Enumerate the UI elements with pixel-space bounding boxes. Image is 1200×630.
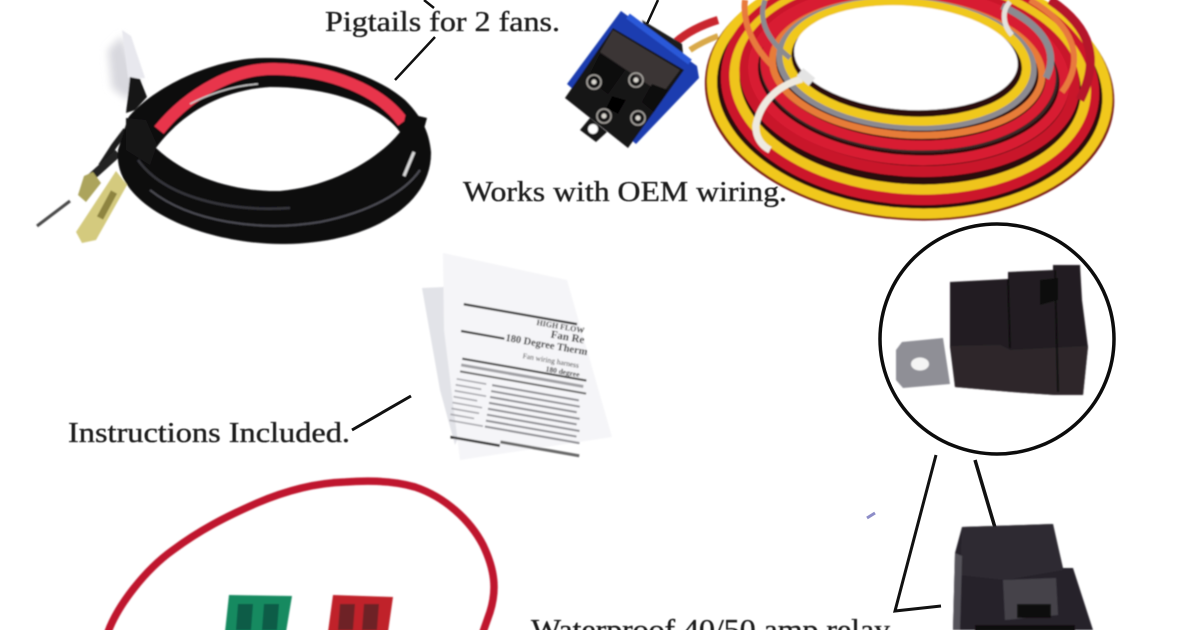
- coil hole: [791, 0, 1021, 117]
- leader lines: relay: [895, 455, 996, 611]
- red fuse: [328, 595, 393, 630]
- coil body: [118, 58, 431, 244]
- connector wires: [676, 20, 718, 42]
- leaflet text: [440, 303, 602, 461]
- leader line: instructions: [352, 396, 411, 430]
- pigtail harness: black and red coil: [37, 30, 431, 244]
- leaflet text: Fan Re: [550, 329, 585, 346]
- relay mounting tab: [896, 338, 950, 388]
- waterproof relay body: [953, 524, 1093, 630]
- leaflet text: HIGH FLOW: [536, 318, 585, 335]
- upper strand crossings: [745, 0, 1090, 100]
- wire coil: red, yellow and gray harness: [676, 0, 1120, 231]
- leaflet text: 180 degree: [545, 364, 581, 379]
- zoom circle: relay detail: [880, 224, 1114, 454]
- green fuse: [225, 595, 292, 630]
- caption: instructions: Instructions Included.: [68, 418, 350, 449]
- leaflet body copy: [449, 379, 490, 426]
- instructions leaflet: [422, 253, 612, 461]
- leader line: pigtails: [395, 0, 435, 80]
- stray mark: [867, 513, 875, 518]
- socket terminals: [587, 73, 645, 125]
- white connector: [108, 30, 147, 113]
- caption: pigtails: Pigtails for 2 fans.: [325, 7, 560, 38]
- heat shrink ends: [126, 118, 157, 165]
- mounting tab: [580, 118, 607, 142]
- outer coil strands: [699, 0, 1120, 231]
- ring terminal wires: [37, 130, 127, 243]
- leaflet text: Fan wiring harness: [522, 351, 580, 370]
- leader line: relay socket: [647, 0, 658, 24]
- blue relay socket: [565, 11, 699, 148]
- caption: OEM wiring: Works with OEM wiring.: [463, 177, 787, 208]
- relay body: [950, 265, 1088, 395]
- red power wire loop: [108, 481, 494, 630]
- highlights: [150, 170, 420, 226]
- leaflet text: 180 Degree Therm: [505, 333, 588, 358]
- red wire: [159, 69, 403, 130]
- cable ties: [756, 2, 1012, 150]
